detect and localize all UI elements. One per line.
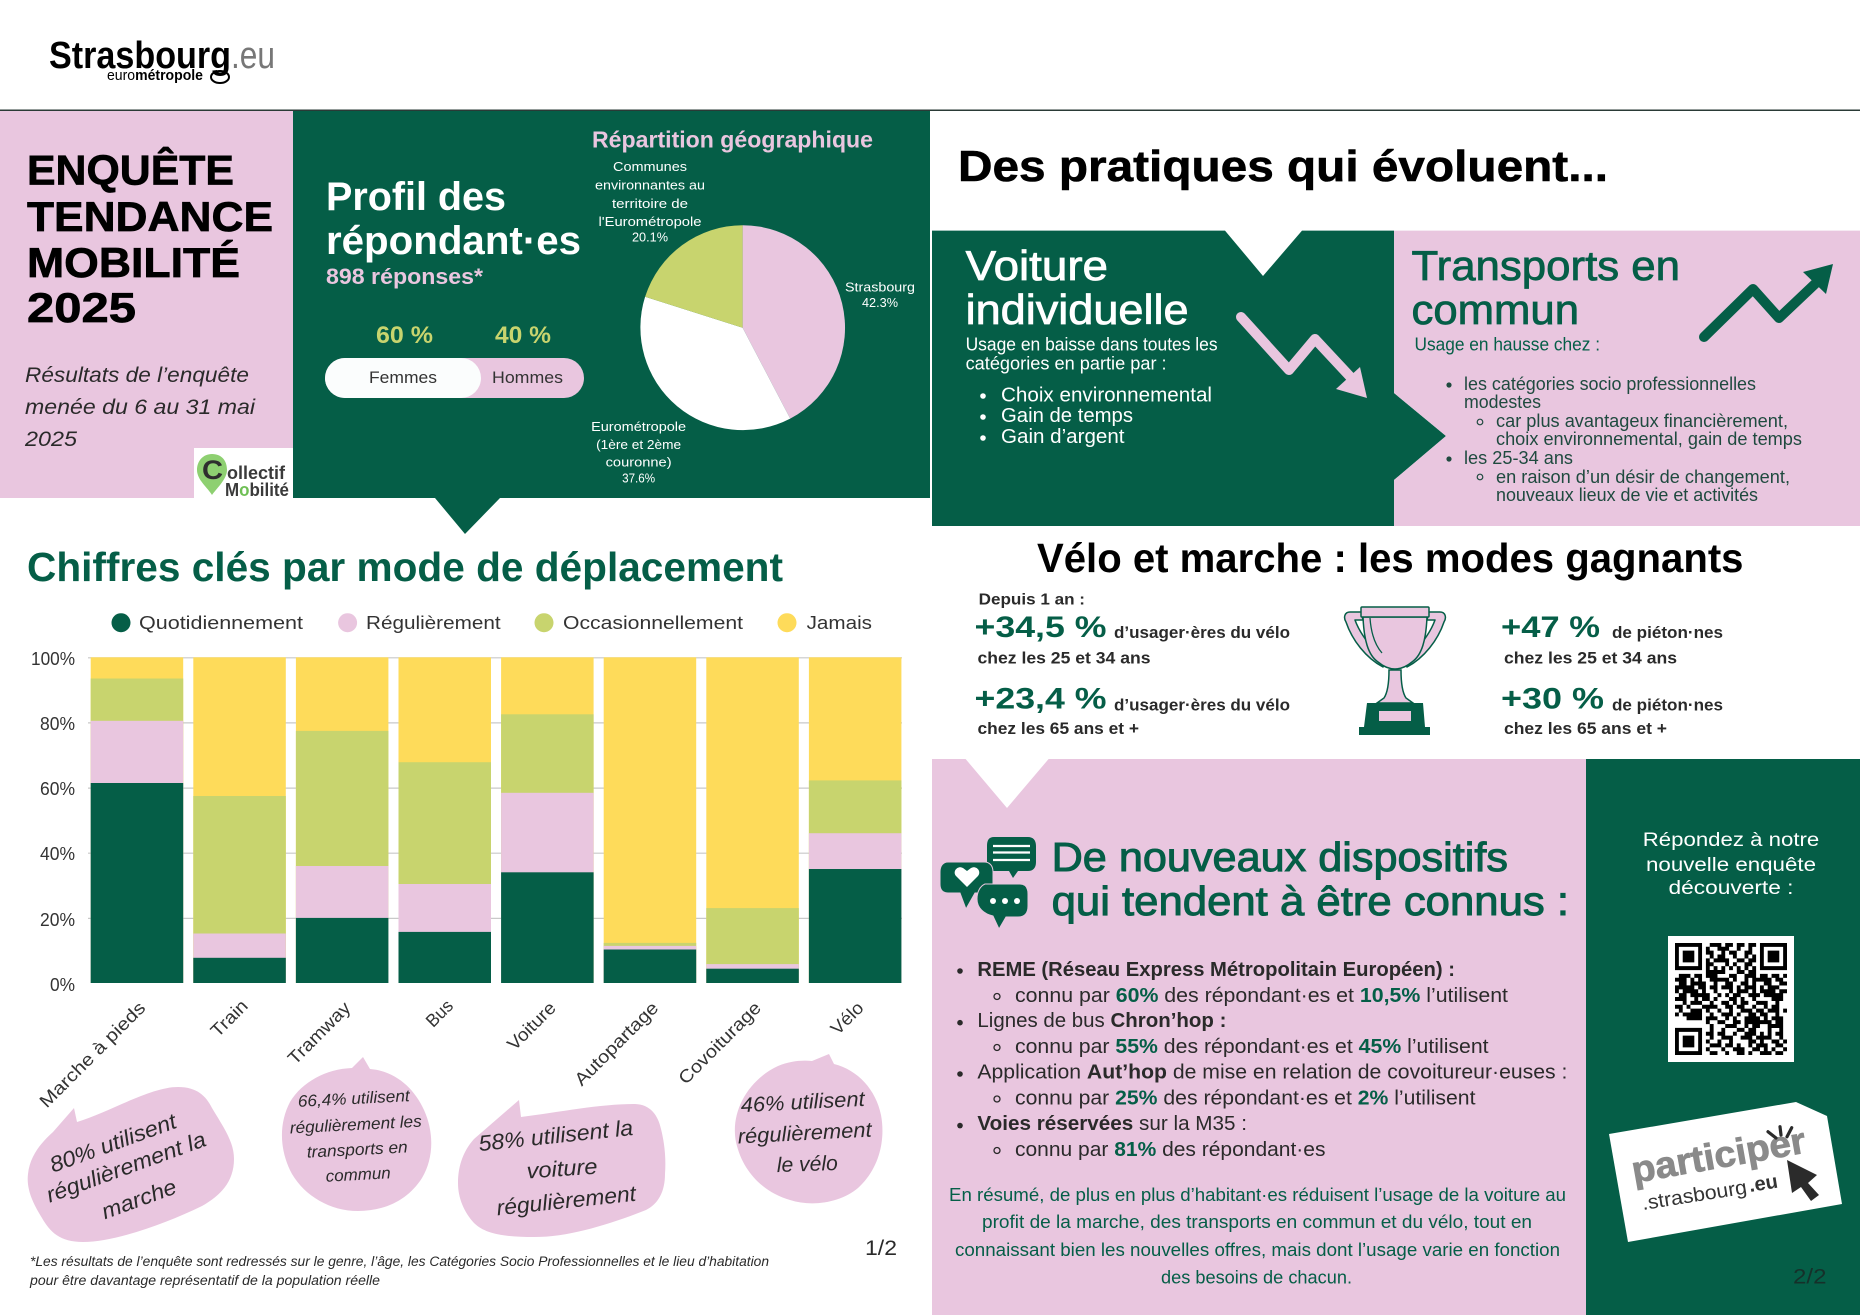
label: Communes: territoire de — [612, 197, 688, 211]
callout: vélo: régulièrement — [737, 1118, 873, 1148]
title — [27, 146, 273, 331]
card: participer.strasbourg.eu: participer — [1628, 1120, 1809, 1191]
heading: profile: répondant·es — [326, 219, 581, 263]
list: services: Application Aut’hop de mise en relation de covoitureur·euses : — [977, 1062, 1567, 1084]
pie chart: geographic distribution — [591, 126, 915, 486]
bullet list: users: les 25-34 ans — [1464, 448, 1573, 468]
x axis labels: Bus — [422, 996, 457, 1031]
logo: Collectif Mobilité: Mobilité — [225, 480, 289, 500]
bullet list: reasons — [980, 385, 1212, 448]
bar: Tramway — [296, 657, 388, 983]
x axis labels: Autopartage — [570, 998, 662, 1090]
card: participer.strasbourg.eu — [1609, 1102, 1842, 1242]
callout: vélo: 46% utilisent — [740, 1088, 866, 1117]
list: services: connu par 55% des répondant·es et 45% l’utilisent — [1015, 1036, 1489, 1058]
invitation text — [1643, 830, 1819, 899]
label: Strasbourg: 42.3% — [862, 296, 898, 310]
footnote: pour être davantage représentatif de la population réelle — [29, 1273, 380, 1288]
callout: transports — [282, 1057, 431, 1211]
icon: cursor — [1768, 1127, 1819, 1201]
gender split — [325, 322, 584, 398]
panel: new services — [932, 759, 1586, 1315]
panel: voiture individuelle — [932, 231, 1446, 526]
list: services: Lignes de bus Chron’hop : — [977, 1010, 1226, 1032]
bar: Marche à pieds — [91, 657, 183, 983]
label: Communes — [595, 160, 705, 244]
arrow: trend up — [1704, 264, 1833, 337]
x axis labels: Voiture — [503, 998, 560, 1054]
stats: vélo: +34,5 % — [974, 611, 1106, 644]
summary text: connaissant bien les nouvelles offres, mais dont l’usage varie en fonction — [955, 1240, 1560, 1260]
label: Communes: environnantes au — [595, 178, 705, 192]
bullet list: users: choix environnemental, gain de temps — [1496, 429, 1802, 449]
y axis labels: 100% — [31, 649, 75, 669]
bullet list: reasons: Gain d’argent — [1001, 426, 1125, 448]
bar: Bus — [398, 657, 491, 983]
title: TENDANCE — [27, 193, 273, 240]
logo: Strasbourg.eu eurométropole: Strasbourg — [49, 35, 231, 77]
bullet list: reasons: Gain de temps — [1001, 405, 1133, 427]
bar: Covoiturage — [706, 657, 799, 983]
bar: Train — [193, 657, 286, 983]
y axis labels — [31, 649, 75, 995]
panel: voiture individuelle: catégories en partie par : — [966, 354, 1167, 374]
callout: voiture — [458, 1100, 665, 1237]
chart legend — [112, 613, 872, 633]
QR code — [1668, 936, 1794, 1062]
panel: transports en commun — [1394, 231, 1860, 526]
stats: marche: chez les 25 et 34 ans — [1504, 650, 1677, 668]
panel: call to action — [1586, 759, 1860, 1315]
label: Eurométropole: (1ère et 2ème — [596, 438, 681, 452]
y axis labels: 0% — [50, 975, 75, 995]
survey dates: Résultats de l’enquête — [25, 363, 249, 387]
logo: Strasbourg.eu eurométropole: eurométropole — [107, 68, 203, 84]
gender split: Hommes — [492, 368, 563, 387]
stats: marche: chez les 65 ans et + — [1504, 720, 1667, 738]
heading: new services: De nouveaux dispositifs — [1052, 834, 1508, 880]
gender split: 40 % — [495, 322, 551, 349]
callout: marche — [28, 1087, 234, 1242]
summary text: des besoins de chacun. — [1161, 1268, 1352, 1288]
chart legend: Occasionnellement — [563, 613, 743, 633]
heading: profile — [326, 175, 581, 289]
arrow: trend down — [1241, 317, 1367, 398]
invitation text: Répondez à notre — [1643, 830, 1819, 851]
y axis labels: 20% — [40, 910, 75, 930]
label: Communes: l'Eurométropole — [598, 215, 702, 229]
footnote — [29, 1254, 769, 1288]
card: participer.strasbourg.eu: .eu — [1747, 1171, 1779, 1197]
chart legend: Jamais — [807, 613, 872, 633]
callout: transports: transports en — [306, 1138, 408, 1162]
stats: marche: de piéton·nes — [1612, 624, 1723, 642]
label: Eurométropole — [591, 420, 686, 486]
callout: marche: marche — [98, 1174, 180, 1224]
panel: voiture individuelle: Voiture — [966, 242, 1108, 289]
stacked bar chart — [31, 649, 902, 1112]
card: participer.strasbourg.eu: .strasbourg — [1640, 1177, 1748, 1215]
label: Strasbourg — [845, 280, 915, 310]
logo: Collectif Mobilité — [194, 448, 293, 500]
label: Eurométropole: Eurométropole — [591, 420, 686, 434]
bullet list: reasons: Choix environnemental — [1001, 385, 1212, 407]
stats: marche — [1501, 611, 1723, 738]
stats: marche: de piéton·nes — [1612, 697, 1723, 715]
callout: vélo: le vélo — [776, 1152, 838, 1177]
stats: vélo — [974, 592, 1290, 738]
stats: vélo: d’usager·ères du vélo — [1114, 697, 1290, 715]
heading: key figures: Chiffres clés par mode de déplacement — [27, 544, 783, 590]
list: services: connu par 25% des répondant·es et 2% l’utilisent — [1015, 1088, 1476, 1110]
callout: transports: 66,4% utilisent — [297, 1087, 412, 1111]
callout: voiture: voiture — [526, 1154, 598, 1183]
footnote: *Les résultats de l’enquête sont redressés sur le genre, l’âge, les Catégories Socio Professionnelles et le lieu d’habitation — [30, 1254, 769, 1269]
pie chart: geographic distribution: Répartition géographique — [592, 126, 873, 152]
chart legend: Régulièrement — [366, 613, 501, 633]
bullet list: users: en raison d’un désir de changement, — [1496, 467, 1790, 487]
heading: profile: 898 réponses* — [326, 264, 483, 289]
survey dates — [24, 363, 256, 451]
stats: marche: +47 % — [1501, 611, 1600, 644]
bar: Vélo — [809, 657, 901, 983]
panel: transports en commun: Usage en hausse chez : — [1414, 335, 1600, 355]
callout: transports: régulièrement les — [289, 1113, 422, 1137]
invitation text: nouvelle enquête — [1646, 855, 1816, 876]
title: 2025 — [27, 284, 136, 331]
bullet list: users — [1446, 374, 1802, 505]
callout: marche: 80% utilisent — [46, 1108, 181, 1177]
heading: new services — [1052, 834, 1569, 924]
stats: vélo: chez les 25 et 34 ans — [978, 650, 1150, 668]
logo: Collectif Mobilité: ollectif — [227, 463, 286, 483]
icon: trophy — [1345, 607, 1445, 735]
icon: speech bubbles — [940, 837, 1036, 929]
chart legend: Quotidiennement — [139, 613, 303, 633]
bullet list: users: car plus avantageux financièrement, — [1496, 411, 1788, 431]
stats: vélo: d’usager·ères du vélo — [1114, 624, 1290, 642]
label: Communes: Communes — [613, 160, 687, 174]
x axis labels: Vélo — [827, 998, 868, 1039]
gender split: Femmes — [369, 368, 437, 387]
bullet list: users: les catégories socio professionnelles — [1464, 374, 1756, 394]
summary text — [949, 1185, 1566, 1288]
list: services: connu par 60% des répondant·es et 10,5% l’utilisent — [1015, 985, 1508, 1007]
page number 2/2: 2/2 — [1793, 1266, 1826, 1288]
invitation text: découverte : — [1668, 878, 1794, 899]
title: ENQUÊTE — [27, 146, 234, 194]
summary text: profit de la marche, des transports en commun et du vélo, tout en — [982, 1212, 1532, 1232]
stats: vélo: chez les 65 ans et + — [978, 720, 1139, 738]
stats: vélo: +23,4 % — [974, 683, 1106, 716]
list: services: REME (Réseau Express Métropolitain Européen) : — [977, 959, 1455, 981]
survey dates: menée du 6 au 31 mai — [25, 395, 256, 419]
logo: Strasbourg.eu eurométropole: .eu — [231, 35, 275, 77]
callout: voiture: 58% utilisent la — [477, 1115, 634, 1156]
label: Eurométropole: couronne) — [606, 456, 672, 470]
bullet list: users: modestes — [1464, 392, 1541, 412]
title: MOBILITÉ — [27, 239, 240, 286]
label: Eurométropole: 37.6% — [622, 472, 655, 486]
list: services — [957, 959, 1567, 1161]
heading: profile: Profil des — [326, 175, 506, 219]
x axis labels: Covoiturage — [674, 998, 765, 1088]
x axis labels: Marche à pieds — [35, 998, 149, 1112]
label: Strasbourg: Strasbourg — [845, 280, 915, 294]
summary text: En résumé, de plus en plus d’habitant·es réduisent l’usage de la voiture au — [949, 1185, 1566, 1205]
x axis labels — [35, 996, 868, 1112]
y axis labels: 40% — [40, 844, 75, 864]
callout: voiture: régulièrement — [495, 1181, 638, 1220]
list: services: connu par 81% des répondant·es — [1015, 1139, 1326, 1161]
x axis labels: Tramway — [284, 998, 355, 1068]
bar: Voiture — [501, 657, 594, 983]
y axis labels: 80% — [40, 714, 75, 734]
callout: vélo — [735, 1054, 882, 1203]
bullet list: users: nouveaux lieux de vie et activités — [1496, 485, 1758, 505]
y axis labels: 60% — [40, 779, 75, 799]
label: Communes: 20.1% — [632, 230, 668, 244]
panel: respondent profile — [293, 111, 930, 534]
panel: transports en commun: commun — [1412, 286, 1579, 333]
gender split: 60 % — [376, 322, 433, 349]
x axis labels: Train — [207, 996, 252, 1041]
stats: vélo: Depuis 1 an : — [979, 592, 1085, 609]
page number 1/2: 1/2 — [865, 1237, 897, 1260]
heading: practices: Des pratiques qui évoluent... — [958, 142, 1608, 191]
callout: marche: régulièrement la — [43, 1126, 209, 1207]
list: services: Voies réservées sur la M35 : — [977, 1113, 1247, 1135]
stats: marche: +30 % — [1501, 683, 1604, 716]
heading: vélo et marche: Vélo et marche : les modes gagnants — [1037, 535, 1744, 581]
panel: survey title — [0, 111, 293, 500]
bar: Autopartage — [604, 657, 696, 983]
panel: voiture individuelle: Usage en baisse dans toutes les — [966, 335, 1218, 355]
panel: voiture individuelle: individuelle — [966, 286, 1189, 333]
callout: transports: commun — [325, 1164, 391, 1186]
survey dates: 2025 — [24, 427, 78, 451]
heading: new services: qui tendent à être connus : — [1052, 878, 1569, 924]
logo: Collectif Mobilité: C — [202, 455, 223, 485]
panel: transports en commun: Transports en — [1412, 242, 1680, 289]
